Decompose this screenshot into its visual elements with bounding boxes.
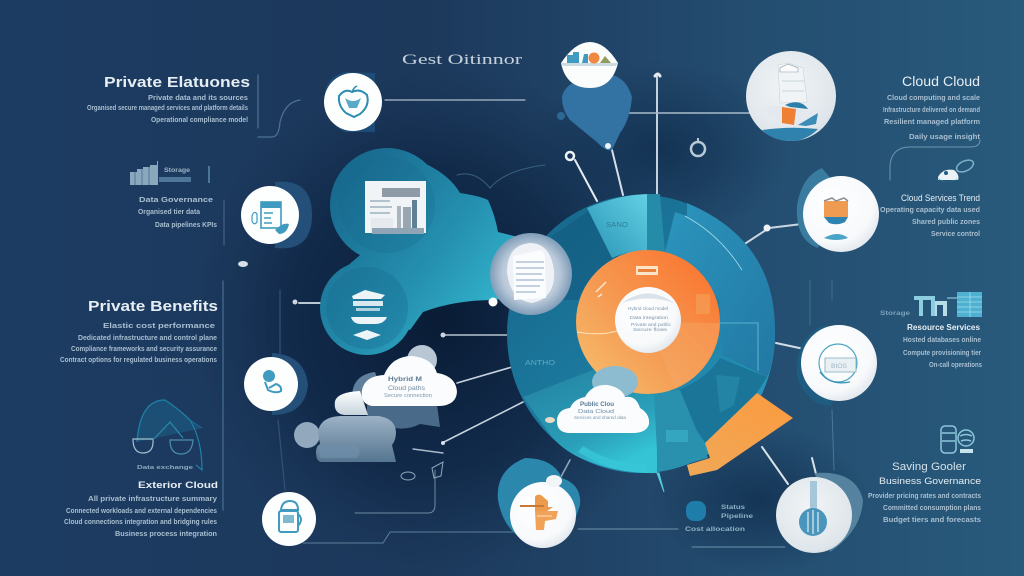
text block: google cost: Budget tiers and forecasts bbox=[883, 517, 981, 524]
cloud: callout left: Hybrid M bbox=[388, 377, 422, 383]
node: document icon circle bbox=[241, 182, 312, 248]
text block: cloud heading: Cloud computing and scale bbox=[887, 95, 980, 102]
node: headset icon circle bbox=[244, 353, 308, 415]
small label: bottom center: Cost allocation bbox=[685, 527, 745, 533]
chart: radial wheel: ANTHO bbox=[525, 360, 556, 367]
text block: right middle: Hosted databases online bbox=[903, 337, 981, 344]
small label: bottom center: Status bbox=[721, 505, 746, 511]
text block: google cost: Business Governance bbox=[879, 476, 981, 487]
text block: external: Business process integration bbox=[115, 531, 217, 538]
chart: right building bars: Storage bbox=[880, 311, 911, 317]
node: gauge circle bbox=[797, 325, 877, 406]
text block: private benefits bbox=[60, 299, 218, 364]
ring: orange centre bbox=[576, 250, 720, 394]
node: test tube circle bbox=[776, 473, 863, 553]
chart: small bars with caption bbox=[130, 161, 210, 185]
text block: cloud benefits: Operating capacity data used bbox=[880, 207, 980, 214]
text block: hub centre: Private and public bbox=[631, 322, 672, 327]
icon: small ring bbox=[691, 138, 705, 156]
text block: cloud heading: Infrastructure delivered on demand bbox=[883, 107, 980, 114]
text block: private benefits: Contract options for regulated business operations bbox=[60, 357, 217, 364]
text block: private elements: Operational compliance model bbox=[151, 117, 248, 124]
cloud: callout right: Data Cloud bbox=[578, 409, 614, 415]
icon: small leaf bbox=[401, 462, 443, 480]
cloud: callout right: Services and shared data bbox=[574, 415, 626, 420]
wedge: bottom panel bbox=[654, 390, 708, 472]
cloud: callout left: Secure connection bbox=[384, 393, 432, 399]
text block: cloud benefits bbox=[880, 193, 980, 238]
text block: google cost: Committed consumption plans bbox=[883, 505, 981, 512]
chart: radial wheel bbox=[507, 194, 793, 492]
node: stack connector dot bbox=[292, 298, 498, 338]
text block: cloud heading: Cloud Cloud bbox=[902, 74, 980, 89]
text block: private benefits: Compliance frameworks and security assurance bbox=[71, 346, 217, 353]
text block: private elements: Private data and its sources bbox=[148, 95, 248, 102]
icon: report with bars bbox=[365, 181, 426, 234]
text block: external: Connected workloads and external dependencies bbox=[66, 508, 217, 515]
node: top right large circle bbox=[746, 51, 836, 141]
wedge: right arc bbox=[665, 203, 775, 377]
text block: external: Exterior Cloud bbox=[138, 480, 218, 491]
text block: private benefits: Dedicated infrastructure and control plane bbox=[78, 335, 217, 342]
panel: teal blob with report and stack circles bbox=[320, 148, 535, 355]
wedge: lower right dark bbox=[678, 358, 767, 443]
text block: right middle bbox=[903, 323, 982, 369]
text block: private benefits: Elastic cost performance bbox=[103, 323, 215, 330]
text block: cloud heading: Daily usage insight bbox=[909, 134, 981, 141]
heading: title: Gest Oitinnor bbox=[402, 52, 522, 68]
text block: hub centre bbox=[615, 287, 681, 353]
cloud: callout left bbox=[335, 356, 457, 415]
icon: whale with mesh bbox=[938, 158, 975, 182]
wedge: lower left to bottom bbox=[523, 368, 657, 473]
node: device icon circle bbox=[262, 492, 316, 546]
text block: google cost bbox=[868, 461, 981, 524]
icon: glasses diagram bbox=[133, 400, 202, 471]
cloud: gray background bbox=[294, 345, 440, 462]
wedge: top light bbox=[587, 194, 647, 258]
text block: cloud benefits: Cloud Services Trend bbox=[901, 193, 980, 204]
text block: cloud heading: Resilient managed platform bbox=[884, 119, 980, 126]
small label: bottom center bbox=[685, 501, 754, 533]
wedge: upper left dark bbox=[537, 210, 620, 300]
cloud: callout left: Cloud paths bbox=[388, 386, 425, 392]
text block: left second: Data Governance bbox=[139, 197, 213, 204]
chart: small bars with caption: Storage bbox=[164, 168, 191, 174]
node: orange box circle bbox=[764, 168, 879, 252]
text block: left second: Data pipelines KPIs bbox=[155, 222, 217, 229]
text block: private elements: Organised secure managed services and platform details bbox=[87, 105, 248, 112]
node: gauge circle: BIOS bbox=[831, 364, 847, 370]
text block: right middle: Compute provisioning tier bbox=[903, 350, 981, 357]
cloud: callout right bbox=[545, 366, 649, 433]
text block: hub centre: Hybrid cloud model bbox=[628, 306, 668, 311]
text block: cloud benefits: Service control bbox=[931, 231, 980, 238]
wedge: orange accent bbox=[687, 393, 793, 476]
text block: cloud benefits: Shared public zones bbox=[912, 219, 980, 226]
accent dots bbox=[238, 152, 574, 445]
node: glass document circle bbox=[490, 233, 572, 315]
chart: right building bars bbox=[880, 292, 982, 317]
text block: google cost: Saving Gooler bbox=[892, 461, 966, 473]
text block: right middle: Resource Services bbox=[907, 323, 981, 332]
text block: external: All private infrastructure summary bbox=[88, 496, 217, 503]
node: top dish icon bbox=[557, 42, 632, 150]
icon: storage containers bbox=[941, 426, 974, 453]
text block: private elements bbox=[87, 75, 250, 124]
node: bottom orange tower circle bbox=[498, 458, 580, 548]
text block: left second bbox=[138, 197, 217, 229]
text block: left second: Organised tier data bbox=[138, 209, 200, 216]
text block: right middle: On-call operations bbox=[929, 362, 982, 369]
text block: external: Cloud connections integration and bridging rules bbox=[64, 519, 217, 526]
small label: bottom center: Pipeline bbox=[721, 514, 754, 520]
text block: external bbox=[64, 480, 218, 538]
text block: google cost: Provider pricing rates and contracts bbox=[868, 493, 981, 500]
text block: hub centre: Data integration bbox=[630, 315, 669, 320]
icon: stacked layers bbox=[351, 290, 387, 340]
chart: radial wheel: SANO bbox=[606, 222, 629, 229]
text block: private benefits: Private Benefits bbox=[88, 299, 218, 315]
connector lines bbox=[223, 74, 980, 547]
icon: glasses diagram: Data exchange bbox=[137, 465, 193, 471]
text block: hub centre: Secure flows bbox=[633, 327, 668, 332]
node: apple icon circle bbox=[324, 72, 382, 132]
cloud: callout right: Public Clou bbox=[580, 402, 614, 408]
text block: private elements: Private Elatuones bbox=[104, 75, 250, 91]
text block: cloud heading bbox=[883, 74, 981, 141]
